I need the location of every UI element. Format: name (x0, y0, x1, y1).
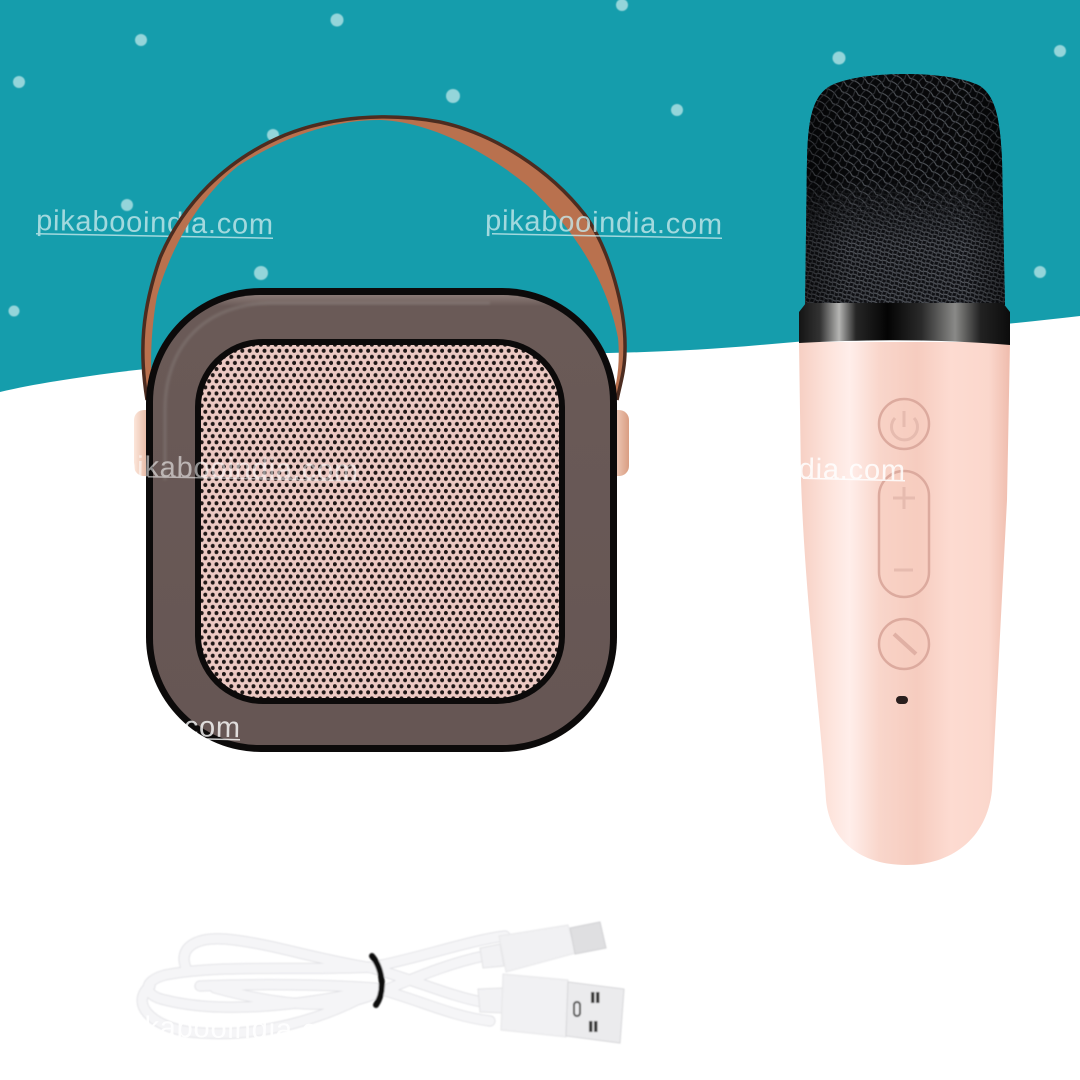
microphone (799, 74, 1010, 865)
mic black band (799, 303, 1010, 345)
watermark: speaker lower: pikabooindia.com (3, 708, 240, 744)
volume button (879, 471, 929, 597)
watermark: cable: pikabooindia.com (120, 1011, 358, 1047)
cable tie (372, 956, 382, 1005)
watermark: top left: pikabooindia.com (36, 205, 273, 241)
mode button (879, 619, 929, 669)
watermark: speaker: pikabooindia.com (120, 451, 358, 487)
usb-a connector (478, 974, 624, 1043)
mic mesh head (805, 74, 1005, 305)
teal wave background (0, 0, 1080, 392)
watermark: microphone: pikabooindia.com (667, 451, 905, 487)
cable loops (142, 936, 505, 1034)
speaker grille frame (195, 339, 565, 704)
watermark: top centre: pikabooindia.com (485, 205, 722, 241)
power button (879, 399, 929, 449)
mic body (799, 342, 1010, 865)
speaker grille (201, 345, 559, 698)
speaker body (146, 288, 617, 752)
speaker handle strap (143, 117, 625, 400)
speaker side lugs (134, 410, 629, 476)
usb-c connector (480, 922, 606, 972)
speaker (134, 288, 629, 752)
speaker bezel (153, 295, 610, 745)
mic hole (896, 696, 908, 704)
usb cable (142, 922, 624, 1043)
snow dots (8, 0, 1066, 316)
